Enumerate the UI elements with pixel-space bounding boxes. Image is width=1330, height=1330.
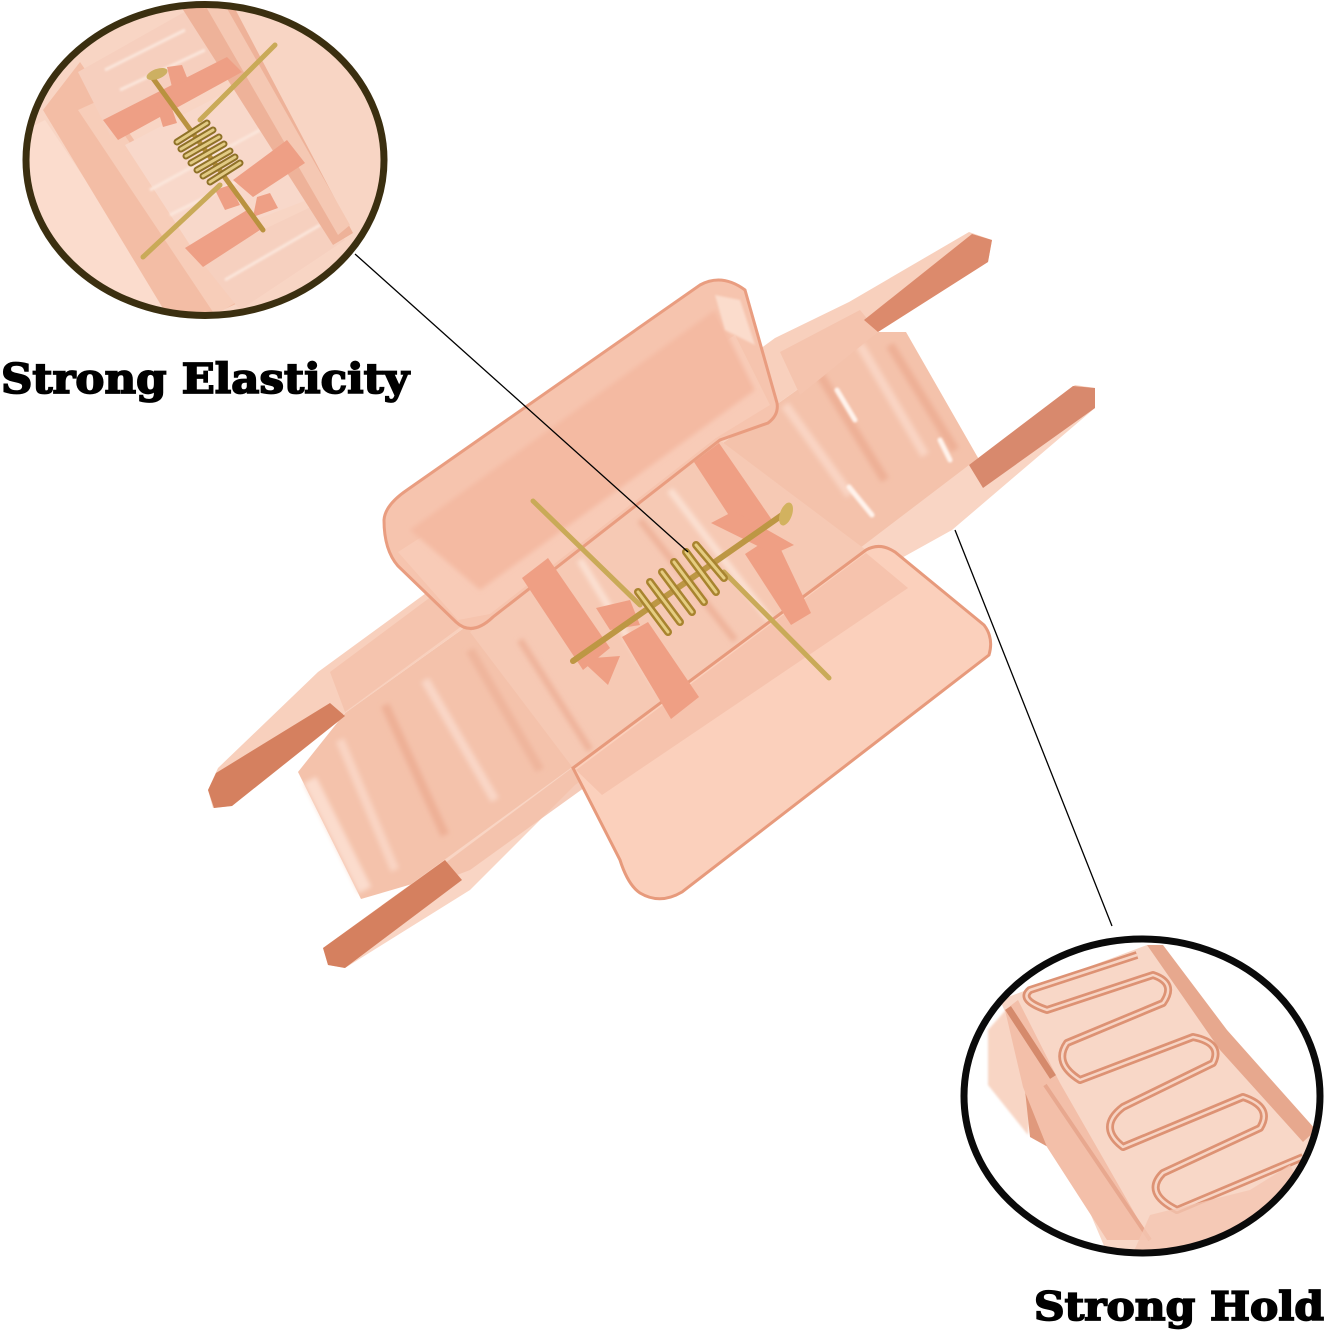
- comb panels: [78, 68, 116, 116]
- center comb visible between grips: [470, 438, 866, 768]
- upper grip: [384, 280, 777, 628]
- label: Strong Elasticity: Strong Elasticity: [1, 355, 410, 403]
- metal spring and pins: [533, 501, 829, 678]
- label: Strong Hold: Strong Hold: [1034, 1284, 1324, 1330]
- left strut: [43, 62, 245, 320]
- lower long bar with paddles: [323, 385, 1095, 968]
- left pale panel: [30, 120, 162, 307]
- plastic hinge tabs: [522, 443, 811, 719]
- zoom callout: spring detail: [20, 0, 390, 325]
- bottom pink shading: [1135, 1165, 1294, 1250]
- right strut: [180, 5, 353, 245]
- serpentine teeth: [1026, 955, 1303, 1210]
- hair claw clip product photo: [208, 232, 1095, 968]
- lower grip: [573, 546, 991, 899]
- left block: [988, 1005, 1032, 1135]
- dark side strip: [1025, 1090, 1048, 1147]
- leader line: teeth to callout: [955, 530, 1112, 926]
- right rail: [1147, 945, 1316, 1142]
- comb panel: [1000, 945, 1320, 1260]
- upper long bar with paddles: [208, 232, 992, 808]
- comb teeth area between the bars: [298, 332, 985, 899]
- long diagonal rail: [1005, 1000, 1150, 1240]
- leader line: spring to callout: [355, 254, 688, 552]
- zoom callout: teeth detail: [955, 930, 1330, 1265]
